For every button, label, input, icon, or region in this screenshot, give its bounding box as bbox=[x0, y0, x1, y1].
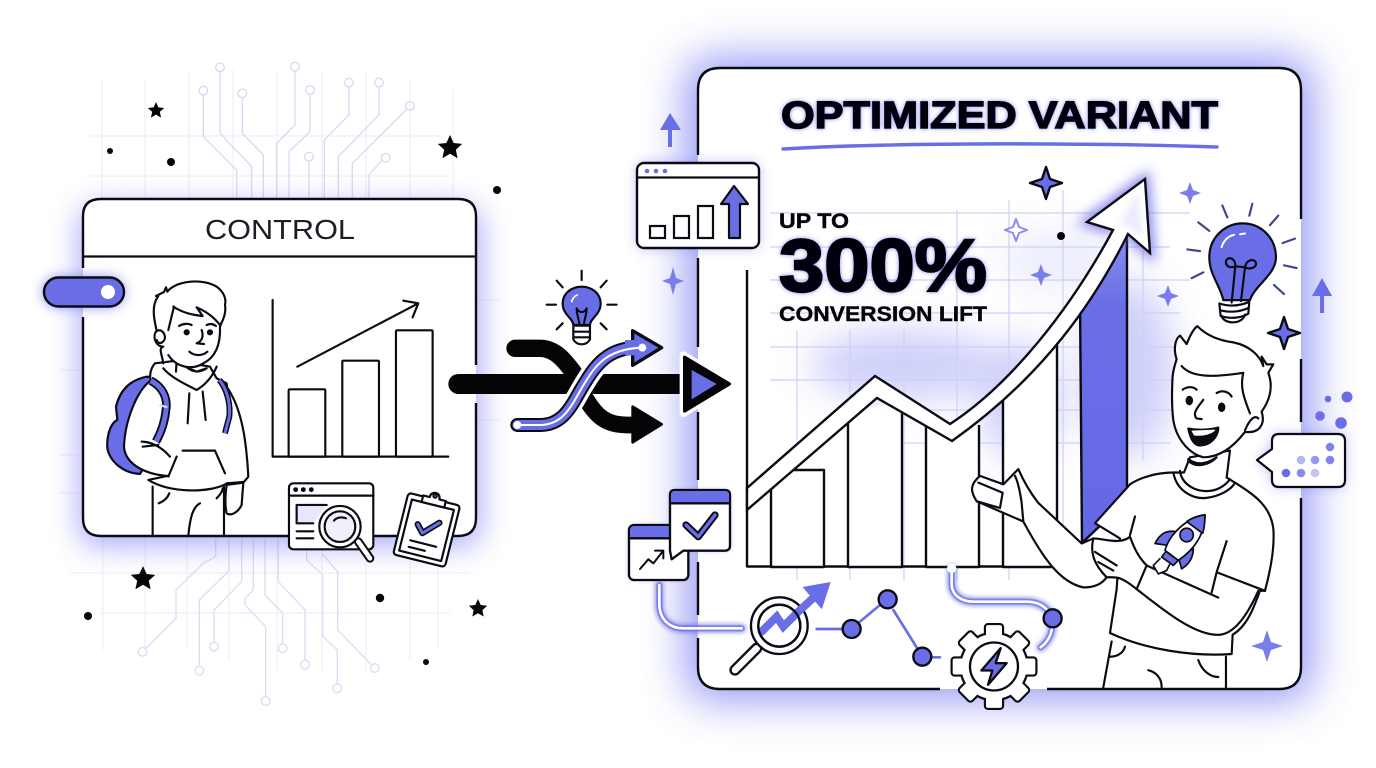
rocket bbox=[1153, 515, 1205, 574]
data nodes bbox=[817, 590, 940, 666]
big bar chart bbox=[747, 225, 1127, 567]
arrow up, right of panel bbox=[1312, 278, 1332, 313]
arrow up, left of panel bbox=[660, 113, 681, 147]
inner glow bbox=[810, 230, 1175, 460]
head bbox=[1172, 326, 1273, 457]
stat: conversion lift: CONVERSION LIFT bbox=[779, 302, 987, 326]
particles bbox=[1315, 392, 1352, 429]
workflow icons and nodes bbox=[629, 490, 1062, 670]
icon: cards bbox=[629, 490, 730, 580]
man presenting bbox=[972, 326, 1274, 687]
icon: clipboard with check bbox=[393, 486, 462, 567]
circuit traces above control panel bbox=[199, 62, 414, 198]
icon: small light bulb bbox=[547, 271, 617, 344]
speech bubble bbox=[1257, 434, 1345, 487]
stat: up to: UP TO bbox=[779, 209, 849, 233]
icon: gear with lightning bbox=[953, 625, 1035, 708]
stat: 300%: 300% bbox=[779, 224, 987, 307]
panel border: control bbox=[83, 199, 476, 536]
panel: control bbox=[83, 198, 476, 536]
growth arrow bbox=[747, 179, 1150, 510]
toggle switch bbox=[43, 277, 124, 307]
small bar chart with arrow bbox=[273, 300, 448, 457]
decorative grid bbox=[770, 190, 1190, 580]
icon: browser with magnifier bbox=[289, 483, 373, 558]
header divider bbox=[83, 255, 476, 258]
panel border: optimized variant bbox=[698, 68, 1301, 689]
purple sparkles inside panel bbox=[1005, 167, 1300, 662]
person with backpack bbox=[107, 281, 248, 536]
panel glow: control bbox=[78, 205, 482, 547]
heading: optimized variant: OPTIMIZED VARIANT bbox=[781, 95, 1218, 137]
panel: optimized variant bbox=[698, 68, 1301, 689]
small black dot bbox=[1057, 232, 1065, 240]
forearm and arm reach bbox=[972, 469, 1147, 589]
black stars and dots, left cluster bbox=[84, 102, 501, 665]
panel glow: optimized variant bbox=[686, 58, 1312, 700]
icon: browser growth card bbox=[636, 162, 760, 249]
glowing connector right bbox=[947, 564, 1062, 647]
heading underline bbox=[783, 144, 1217, 149]
split arrows bbox=[458, 331, 732, 442]
heading: control: CONTROL bbox=[205, 214, 355, 245]
sparkle, left of panel bbox=[662, 267, 684, 295]
decorative background grid: control bbox=[60, 70, 500, 670]
icon: magnifier with trend bbox=[735, 583, 830, 670]
glowing connector left bbox=[659, 585, 742, 628]
circuit traces below control panel bbox=[138, 538, 379, 705]
icon: large light bulb bbox=[1187, 204, 1297, 322]
